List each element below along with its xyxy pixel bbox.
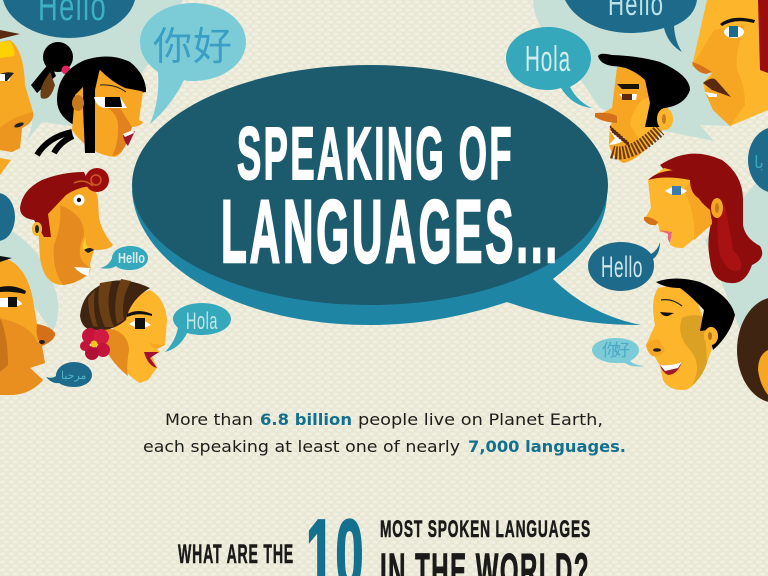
bubble face: [132, 65, 608, 305]
heading: what are the 10 most spoken languages: [178, 499, 591, 576]
intro text line one: [165, 410, 603, 429]
main speech bubble: [132, 65, 641, 325]
face: man with curly red hair: [20, 168, 113, 285]
speech bubble: Chinese hello large: [140, 3, 246, 124]
speech bubble: Hello top left: [2, 0, 136, 38]
intro text line two: 7,000 languages.: [468, 437, 626, 456]
speech bubble: Hello right: Hello: [601, 251, 643, 284]
speech bubble: Hello top right: [565, 0, 697, 52]
intro text line one: 6.8 billion: [260, 410, 352, 429]
speech bubble: Arabic hello: [46, 362, 92, 387]
face: bearded man: [595, 54, 690, 163]
speech bubble: Chinese hello small: [592, 338, 646, 367]
intro text line one: people live on Planet Earth,: [358, 410, 603, 429]
speech bubble: Chinese hello small: 你好: [602, 341, 630, 360]
heading part: most spoken languages: MOST SPOKEN LANGUAGES: [380, 516, 591, 543]
speech bubble: Hola left: Hola: [186, 308, 218, 335]
speech bubble: Hello small left: [100, 246, 148, 270]
face: man at lower left: [0, 256, 55, 395]
bubble: dark blue left edge: [0, 193, 15, 241]
bubble: Arabic at right edge: با: [754, 153, 764, 172]
intro text line two: each speaking at least one of nearly: [143, 437, 460, 456]
speech bubble: Hola left: [165, 303, 231, 352]
speech bubble: Hello small left: Hello: [118, 250, 145, 267]
speech bubble: Chinese hello large: 你好: [153, 26, 232, 69]
face: young man with black hair: [646, 278, 735, 390]
pale speech shape: upper left: [0, 0, 183, 143]
speech bubble: Hola top right: [506, 27, 592, 108]
pale speech shape: upper right: [533, 0, 768, 141]
speech bubble: Arabic hello: مرحبا: [61, 370, 87, 382]
face: woman with black hair and bun: [31, 42, 146, 157]
speech bubble: Hello right: [588, 242, 660, 291]
pale speech shape: lower left: [0, 225, 58, 332]
face: woman with flower: [80, 279, 167, 383]
face: lower right brown hair figure: [737, 297, 768, 403]
speech bubble: Hola top right: Hola: [525, 38, 571, 79]
heading part: what are the: WHAT ARE THE: [178, 539, 294, 569]
bubble shadow with tail: [132, 190, 641, 325]
face: man cut off at left top: [0, 30, 33, 175]
bubble: Arabic at right edge: [748, 127, 768, 193]
pale speech shape: lower right: [705, 170, 768, 335]
face: woman with red hair: [644, 154, 762, 283]
face: large man with moustache: [692, 0, 768, 126]
intro text line one: More than: [165, 410, 253, 429]
intro text line two: [143, 437, 626, 456]
